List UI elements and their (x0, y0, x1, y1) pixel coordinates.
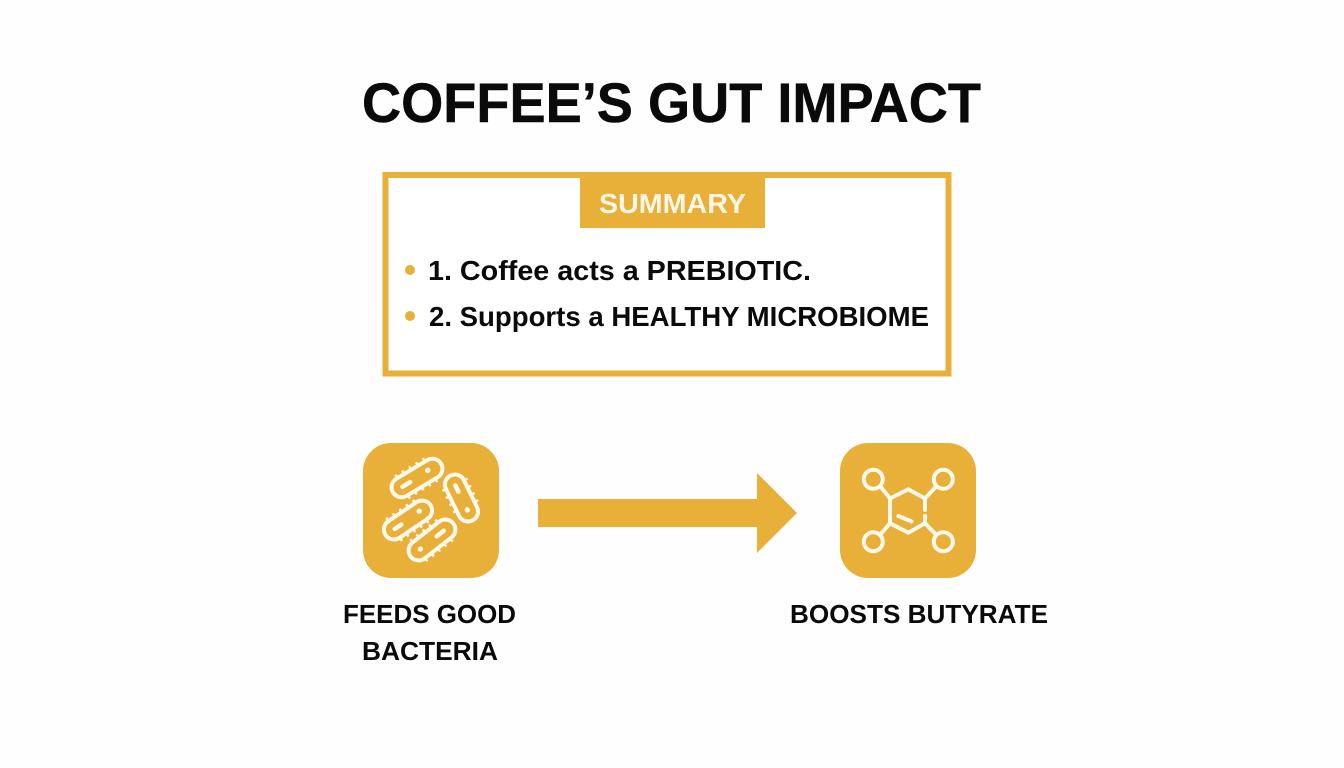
arrow (538, 473, 797, 553)
summary heading tab (580, 178, 765, 228)
label: feeds good bacteria: FEEDS GOOD (343, 601, 516, 629)
summary item 1: 1. Coffee acts a PREBIOTIC. (428, 255, 811, 286)
panel frame (386, 175, 948, 374)
icon: molecule (840, 443, 976, 578)
icon: bacteria (363, 443, 499, 578)
title: COFFEE’S GUT IMPACT (362, 71, 981, 134)
label: boosts butyrate: BOOSTS BUTYRATE (790, 601, 1048, 629)
summary item 2: 2. Supports a HEALTHY MICROBIOME (429, 301, 929, 332)
panel: summary (386, 175, 948, 374)
label: feeds good bacteria (343, 601, 516, 666)
summary heading tab: SUMMARY (599, 188, 746, 219)
label: feeds good bacteria: BACTERIA (362, 638, 498, 666)
